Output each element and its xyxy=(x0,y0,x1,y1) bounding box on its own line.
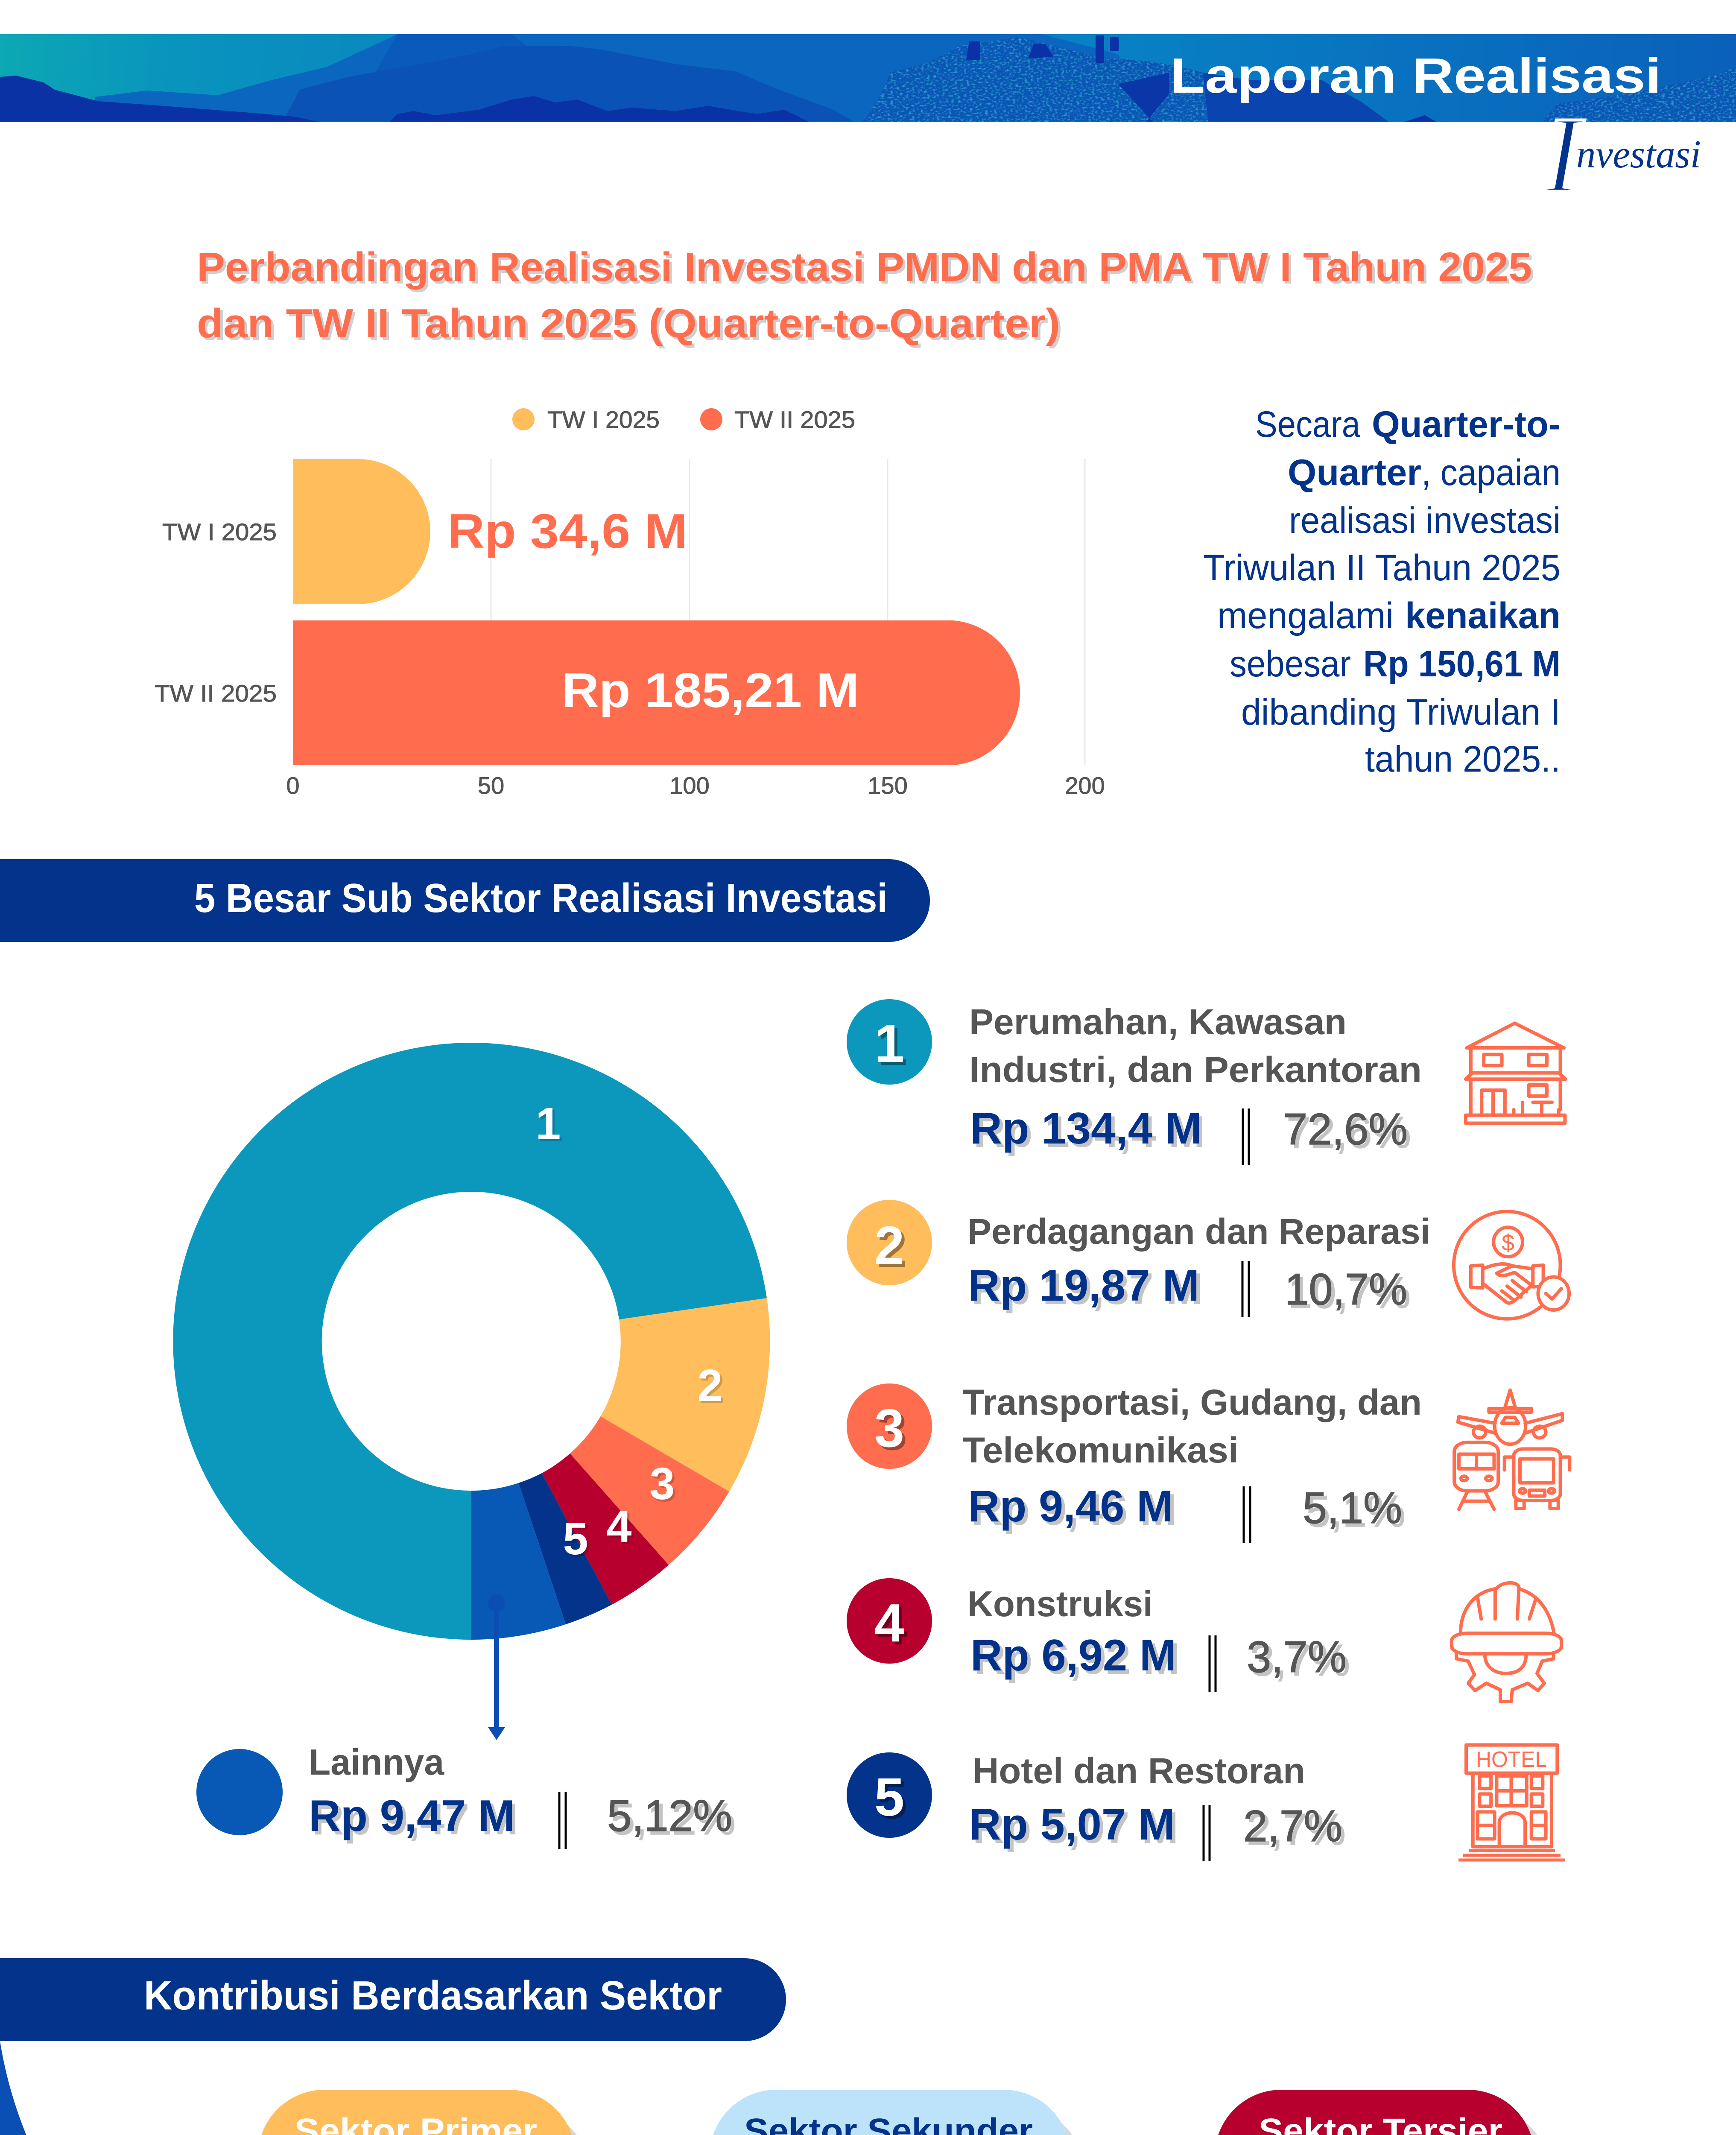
heading: kontribusi sektor: Kontribusi Berdasarkan Sektor xyxy=(144,1973,722,2018)
text block: quarter-to-quarter summary xyxy=(1203,404,1561,780)
heading: kontribusi sektor xyxy=(0,1958,786,2041)
category labels xyxy=(155,518,277,707)
category labels: TW I 2025 xyxy=(162,518,277,545)
list item 1: Industri, dan Perkantoran xyxy=(969,1050,1422,1090)
list item 1: 72,6% xyxy=(1283,1105,1408,1154)
slice 2 xyxy=(600,1298,770,1492)
sector: tersier xyxy=(1215,2090,1550,2135)
text block: quarter-to-quarter summary: realisasi investasi xyxy=(1289,500,1561,541)
heading: 5 besar sub sektor: 5 Besar Sub Sektor Realisasi Investasi xyxy=(194,875,888,921)
text block: quarter-to-quarter summary: sebesar xyxy=(1230,643,1351,684)
donut chart xyxy=(173,1043,770,1640)
legend item: lainnya: Rp 9,47 M xyxy=(309,1791,515,1841)
list item 3: Transportasi, Gudang, dan xyxy=(962,1382,1422,1422)
text block: quarter-to-quarter summary: Triwulan II Tahun 2025 xyxy=(1203,547,1561,588)
list item 3: 5,1% xyxy=(1303,1483,1402,1533)
axis labels: 0 xyxy=(286,772,300,799)
list item 4: 4 xyxy=(874,1593,904,1653)
list item 5: Rp 5,07 M xyxy=(969,1800,1175,1849)
list item 2: 10,7% xyxy=(1285,1265,1407,1314)
icon: helmet xyxy=(1452,1583,1561,1702)
list item 3: Rp 9,46 M xyxy=(968,1482,1173,1531)
decorative wave xyxy=(0,2041,451,2135)
script subtitle: I xyxy=(1544,95,1585,215)
slice 5 xyxy=(518,1473,612,1624)
text block: quarter-to-quarter summary: , capaian xyxy=(1421,452,1561,493)
text block: quarter-to-quarter summary: tahun 2025.. xyxy=(1365,739,1561,780)
legend item: lainnya xyxy=(196,1742,732,1849)
list item 1 xyxy=(847,999,1566,1165)
script subtitle: nvestasi xyxy=(1576,132,1701,176)
text block: quarter-to-quarter summary: kenaikan xyxy=(1405,595,1561,636)
sector: sekunder xyxy=(709,2090,1085,2135)
text block: quarter-to-quarter summary: dibanding Triwulan I xyxy=(1241,692,1561,733)
icon: handshake: $ xyxy=(1502,1230,1514,1256)
icon: house xyxy=(1466,1023,1566,1123)
axis labels: 200 xyxy=(1065,772,1105,799)
text block: quarter-to-quarter summary: mengalami xyxy=(1217,595,1394,636)
banner title: Laporan Realisasi xyxy=(1170,48,1661,103)
list item 4: 3,7% xyxy=(1247,1632,1347,1682)
arrow: lainnya callout xyxy=(488,1594,505,1740)
slice 3 xyxy=(570,1416,729,1565)
list item 3 xyxy=(847,1382,1569,1543)
slice numbers: 3 xyxy=(650,1459,675,1509)
list item 2: 2 xyxy=(874,1215,904,1275)
mountain banner background xyxy=(0,34,1736,122)
list item 1: Perumahan, Kawasan xyxy=(969,1002,1347,1042)
header banner xyxy=(0,34,1736,122)
icon: handshake xyxy=(1454,1211,1569,1319)
sector: primer xyxy=(211,2090,589,2135)
chart title: dan TW II Tahun 2025 (Quarter-to-Quarter) xyxy=(197,301,1060,346)
text block: quarter-to-quarter summary: Quarter xyxy=(1288,452,1421,493)
list item 1: 1 xyxy=(874,1013,904,1073)
icon: transport xyxy=(1454,1390,1569,1509)
axis labels: 100 xyxy=(669,772,710,799)
slice numbers: 1 xyxy=(536,1099,561,1149)
text block: quarter-to-quarter summary: Secara xyxy=(1255,404,1360,445)
value: TW I: Rp 34,6 M xyxy=(447,504,687,559)
axis labels: 50 xyxy=(478,772,504,799)
bar: TW I 2025 xyxy=(293,459,430,604)
heading: 5 besar sub sektor xyxy=(0,859,930,942)
text block: quarter-to-quarter summary: Quarter-to- xyxy=(1372,404,1561,445)
list item 5: 5 xyxy=(874,1767,904,1827)
slice numbers: 2 xyxy=(698,1360,722,1411)
list item 3: Telekomunikasi xyxy=(962,1430,1239,1470)
list item 4: Rp 6,92 M xyxy=(970,1631,1176,1680)
list item 2: Rp 19,87 M xyxy=(968,1261,1199,1310)
chart title: Perbandingan Realisasi Investasi PMDN dan PMA TW I Tahun 2025 xyxy=(197,244,1532,290)
list item 2 xyxy=(847,1200,1569,1319)
list item 5: 2,7% xyxy=(1243,1802,1342,1851)
slice numbers: 4 xyxy=(607,1501,632,1552)
bar: TW II 2025 xyxy=(293,620,1020,765)
slice 1 xyxy=(173,1043,767,1640)
legend xyxy=(512,406,855,433)
list item 5: Hotel dan Restoran xyxy=(973,1751,1305,1791)
legend item: lainnya: 5,12% xyxy=(607,1791,732,1841)
list item 5 xyxy=(847,1745,1565,1861)
list item 4 xyxy=(847,1578,1561,1702)
list item 4: Konstruksi xyxy=(967,1584,1153,1624)
axis labels xyxy=(286,772,1105,799)
legend: TW II 2025 xyxy=(734,406,855,433)
value: TW II: Rp 185,21 M xyxy=(562,664,859,718)
list item 2: Perdagangan dan Reparasi xyxy=(967,1211,1430,1252)
list item 3: 3 xyxy=(874,1398,904,1458)
slice lainnya xyxy=(471,1483,566,1640)
axis labels: 150 xyxy=(868,772,908,799)
text block: quarter-to-quarter summary: Rp 150,61 M xyxy=(1363,643,1561,684)
category labels: TW II 2025 xyxy=(155,680,277,707)
slice numbers: 5 xyxy=(563,1514,588,1564)
icon: hotel xyxy=(1458,1745,1565,1860)
bar chart xyxy=(155,406,1105,799)
chart title xyxy=(197,244,1532,346)
icon: hotel: HOTEL xyxy=(1476,1747,1547,1772)
list item 1: Rp 134,4 M xyxy=(970,1104,1202,1153)
slice numbers xyxy=(536,1099,722,1564)
legend item: lainnya: Lainnya xyxy=(309,1742,444,1783)
slice 4 xyxy=(542,1454,669,1605)
legend: TW I 2025 xyxy=(547,406,660,433)
